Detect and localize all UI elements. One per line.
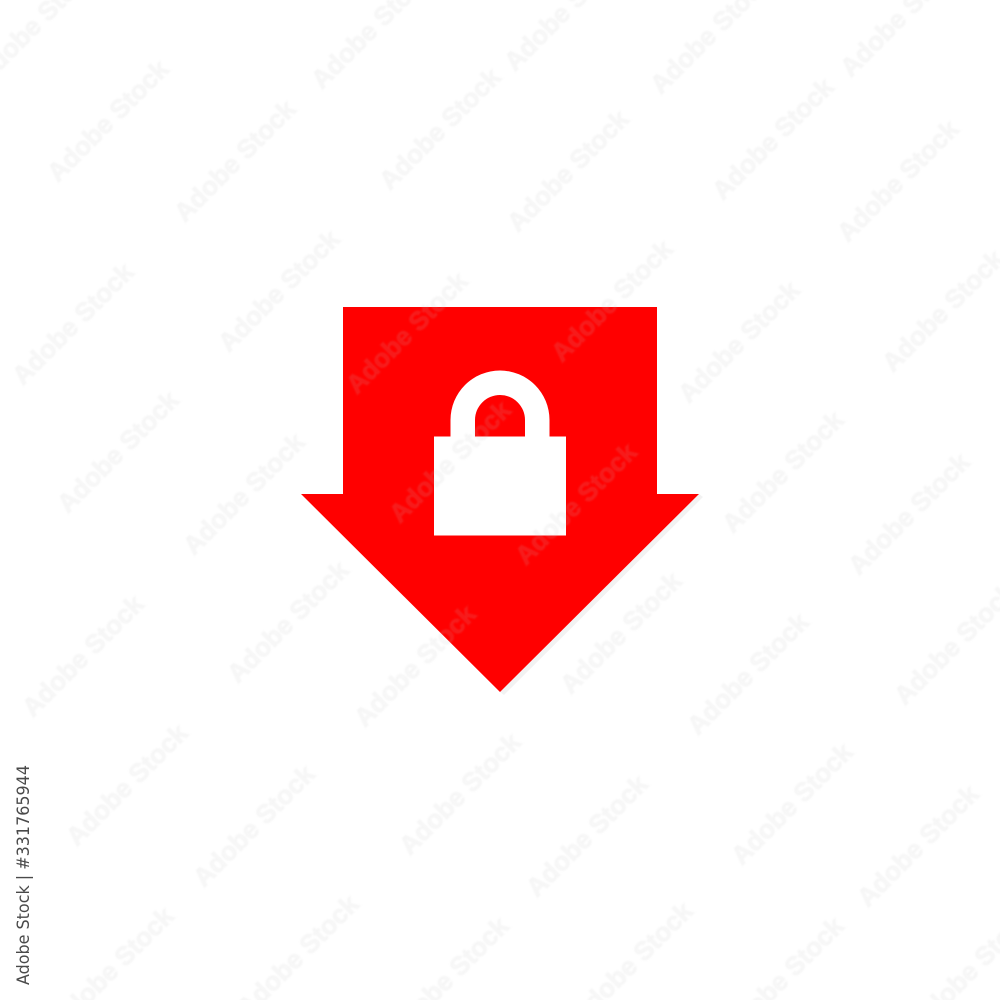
arrow soft shadow [500, 494, 703, 695]
watermark pattern: Adobe Stock [716, 404, 850, 538]
watermark pattern: Adobe Stock [348, 598, 482, 732]
watermark pattern: Adobe Stock [6, 256, 140, 390]
watermark pattern: Adobe Stock [672, 274, 806, 408]
watermark pattern: Adobe Stock [520, 768, 654, 902]
padlock shackle [450, 370, 550, 437]
watermark pattern: Adobe Stock [509, 436, 643, 570]
watermark pattern: Adobe Stock [51, 384, 185, 518]
watermark pattern: Adobe Stock [187, 758, 321, 892]
watermark pattern: Adobe Stock [168, 93, 302, 227]
watermark pattern: Adobe Stock [60, 717, 194, 851]
watermark pattern: Adobe Stock [706, 71, 840, 205]
watermark pattern: Adobe Stock [842, 446, 976, 580]
watermark pattern: Adobe Stock [383, 394, 517, 528]
watermark pattern: Adobe Stock [177, 426, 311, 560]
icon: white padlock [434, 370, 566, 536]
watermark pattern: Adobe Stock [221, 554, 355, 688]
padlock body [434, 436, 566, 536]
icon: red down arrow [301, 307, 699, 692]
watermark pattern: Adobe Stock [725, 736, 859, 870]
watermark pattern: Adobe Stock [681, 606, 815, 740]
watermark pattern: Adobe Stock [501, 103, 635, 237]
watermark pattern: Adobe Stock [373, 61, 507, 195]
watermark pattern: Adobe Stock [41, 53, 175, 187]
watermark pattern: Adobe Stock [340, 265, 474, 399]
watermark pattern: Adobe Stock [851, 778, 985, 912]
watermark pattern: Adobe Stock [831, 113, 965, 247]
stock credit text: Adobe Stock | #331765944 [14, 765, 34, 985]
watermark pattern: Adobe Stock [212, 223, 346, 357]
watermark pattern: Adobe Stock [554, 565, 688, 699]
watermark pattern: Adobe Stock [16, 588, 150, 722]
watermark pattern: Adobe Stock [545, 233, 679, 367]
watermark pattern: Adobe Stock [393, 726, 527, 860]
